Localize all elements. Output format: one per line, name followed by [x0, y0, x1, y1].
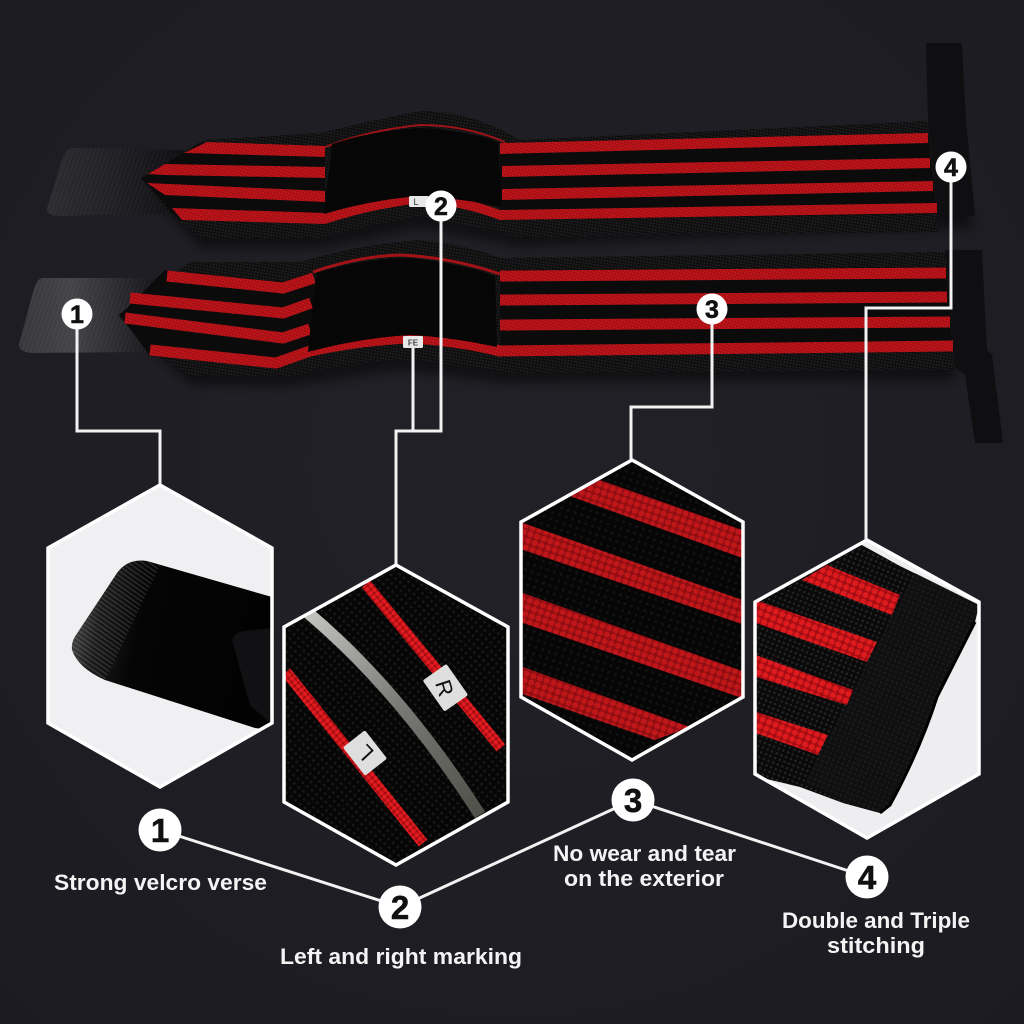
marker 3 on strap: 3 — [705, 296, 719, 324]
hexagon 1: velcro close-up — [40, 480, 280, 790]
caption 4 — [782, 908, 970, 958]
timeline connector — [160, 800, 867, 907]
tag R — [423, 664, 468, 712]
connector line 1 — [77, 314, 160, 486]
velcro patch, bottom wrap — [308, 258, 497, 352]
caption 4: stitching — [827, 933, 925, 958]
red stripes, top wrap — [147, 133, 937, 224]
hexagon 2: left and right marking close-up — [280, 560, 512, 870]
step 1 number: 1 — [151, 812, 169, 849]
step 2 number: 2 — [391, 889, 409, 926]
marker 2 on strap — [426, 190, 456, 222]
marker 2 on strap: 2 — [434, 193, 448, 221]
hexagon 3: exterior weave close-up — [515, 455, 750, 765]
loop strap, bottom wrap — [945, 250, 1003, 443]
caption 2: Left and right marking — [280, 944, 522, 969]
marker 4 on strap: 4 — [944, 154, 958, 182]
bottom wrist wrap — [19, 240, 1003, 443]
caption 4: Double and Triple — [782, 908, 970, 933]
marker 1 on strap — [62, 298, 92, 330]
step 3 number: 3 — [624, 782, 642, 819]
thin red edge line, top wrap — [325, 125, 505, 147]
size tag FE — [403, 336, 423, 348]
connector line 3 — [631, 309, 712, 461]
loop strap, top wrap — [926, 43, 975, 221]
tag L — [343, 730, 387, 776]
top wrist wrap — [47, 43, 975, 248]
marker 1 on strap: 1 — [70, 301, 84, 329]
tag R: R — [430, 677, 459, 700]
marker 4 on strap — [936, 152, 966, 182]
strap body, bottom wrap — [118, 240, 955, 376]
step 3 number — [612, 778, 654, 822]
caption 3: No wear and tear — [553, 841, 736, 866]
step 1 number — [138, 808, 182, 852]
hexagon 4: stitching close-up — [750, 535, 985, 845]
tag L: L — [352, 740, 379, 766]
size tag L — [409, 196, 429, 207]
strap body, top wrap — [140, 111, 938, 238]
velcro tab, bottom wrap — [19, 278, 170, 353]
connector line 4 — [866, 167, 951, 541]
step 4 number — [846, 856, 888, 898]
red stripes, bottom wrap — [125, 273, 953, 363]
thin red edge line, bottom wrap — [313, 255, 500, 274]
size tag L: L — [413, 197, 419, 207]
caption 3: on the exterior — [564, 866, 724, 891]
caption 3 — [553, 841, 736, 891]
step 2 number — [378, 886, 422, 928]
step 4 number: 4 — [858, 859, 877, 896]
caption 1: Strong velcro verse — [54, 870, 267, 895]
connector line 2 — [396, 206, 441, 566]
velcro tab, top wrap — [47, 148, 185, 216]
velcro patch, top wrap — [324, 128, 502, 214]
marker 3 on strap — [696, 294, 728, 324]
size tag FE: FE — [408, 338, 419, 348]
